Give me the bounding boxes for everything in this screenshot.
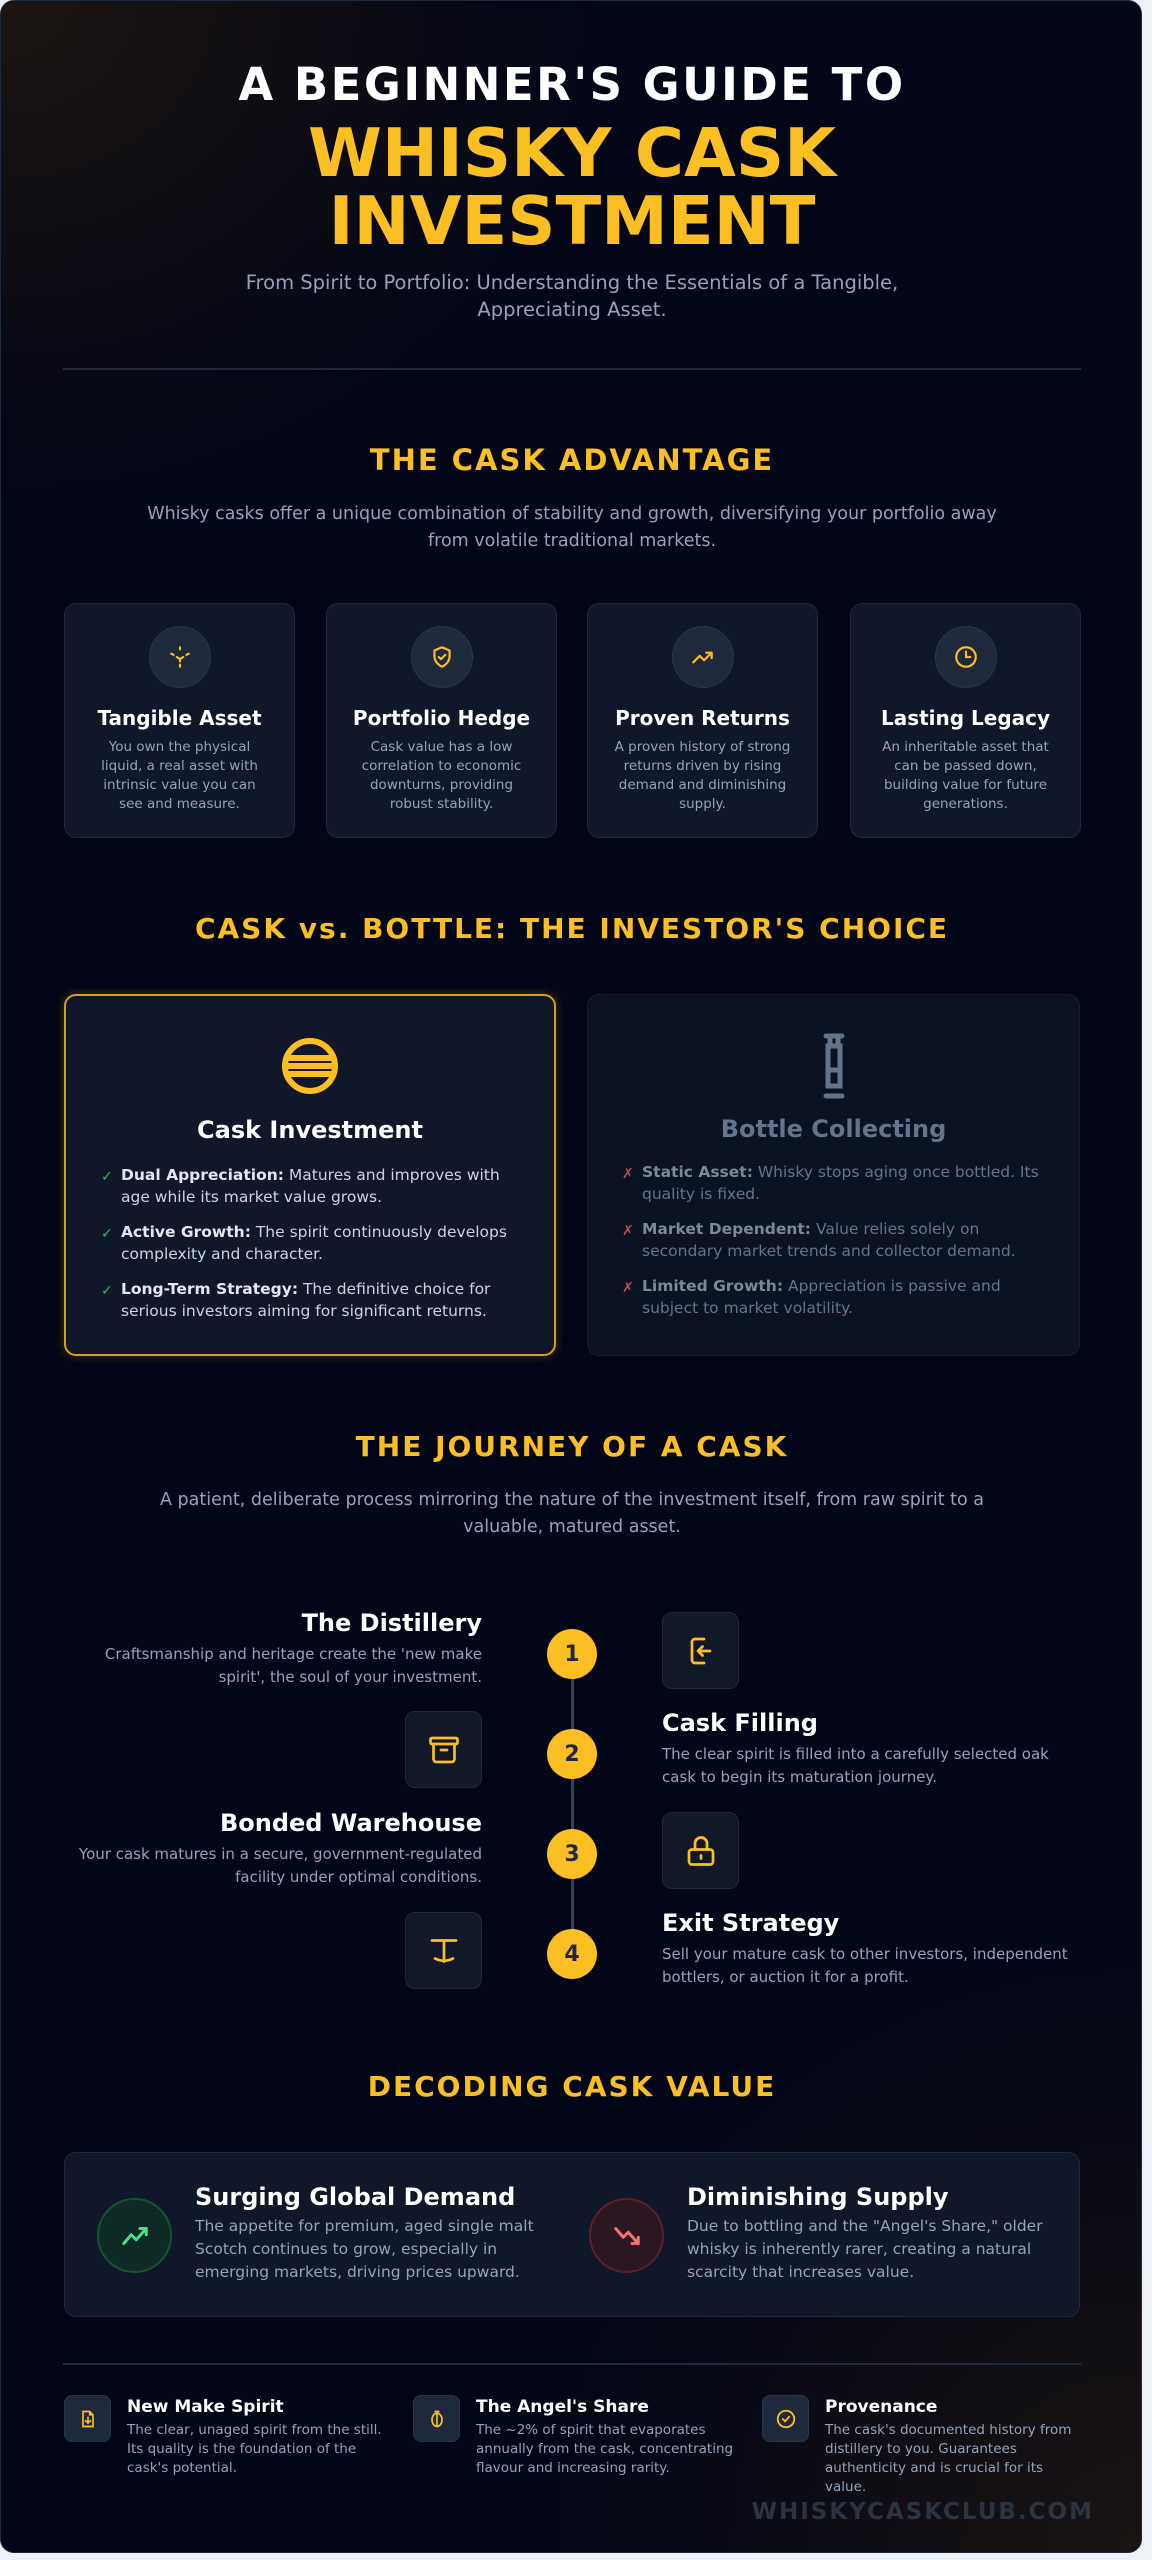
panel: cask investment: Long-Term Strategy: The definitive choice for serious investors aiming for significant returns. — [121, 1280, 490, 1320]
panel: cask investment: Active Growth: The spirit continuously develops complexity and character. — [121, 1223, 507, 1263]
panel: cask investment: Dual Appreciation: Matures and improves with age while its market value grows. — [121, 1166, 500, 1206]
panel: bottle collecting: Static Asset: Whisky stops aging once bottled. Its quality is fixed. — [642, 1163, 1039, 1203]
text: demand: Surging Global Demand — [195, 2183, 515, 2211]
heading: cask vs bottle: CASK vs. BOTTLE: THE INVESTOR'S CHOICE — [195, 912, 949, 945]
text: demand — [194, 2183, 534, 2281]
icon: demand — [97, 2198, 172, 2273]
text: supply: Diminishing Supply — [687, 2183, 949, 2211]
journey intro: A patient, deliberate process mirroring the nature of the investment itself, from raw spirit to a valuable, matured asset. — [160, 1490, 984, 1537]
step: bonded warehouse: Your cask matures in a secure, government-regulated facility under optimal conditions. — [79, 1845, 482, 1886]
panel: bottle collecting — [587, 994, 1080, 1356]
icon: clock — [935, 626, 997, 688]
panel: bottle collecting: Limited Growth: Appreciation is passive and subject to market volatility. — [642, 1277, 1001, 1317]
icon: cask — [282, 1038, 338, 1094]
icon: filling — [662, 1612, 739, 1689]
step 3 number: 3 — [564, 1842, 580, 1866]
step 3 number — [547, 1829, 597, 1879]
text: supply — [687, 2183, 1043, 2281]
icon: file — [64, 2395, 111, 2442]
text: supply: Due to bottling and the "Angel's Share," older whisky is inherently rarer, creating a natural scarcity that increases value. — [687, 2217, 1043, 2281]
card: tangible asset: You own the physical liquid, a real asset with intrinsic value you can see and measure. — [101, 739, 258, 812]
glossary: provenance — [762, 2395, 1071, 2495]
step 2 number: 2 — [564, 1742, 580, 1766]
icon: angel — [413, 2395, 460, 2442]
step: bonded warehouse — [78, 1809, 482, 1886]
step 4 number — [547, 1929, 597, 1979]
step 2 number — [547, 1729, 597, 1779]
title: A BEGINNER'S GUIDE TO — [238, 58, 906, 111]
step: cask filling: The clear spirit is filled into a carefully selected oak cask to begin its maturation journey. — [662, 1745, 1049, 1786]
card: lasting legacy: An inheritable asset that can be passed down, building value for future generations. — [882, 739, 1049, 812]
panel: bottle collecting: ✗ — [622, 1223, 634, 1239]
icon: check — [762, 2395, 809, 2442]
glossary: new make spirit: The clear, unaged spirit from the still. Its quality is the foundation of the cask's potential. — [127, 2422, 382, 2476]
panel: bottle collecting: ✗ — [622, 1280, 634, 1296]
icon: trend — [672, 626, 734, 688]
step: the distillery — [105, 1609, 482, 1686]
icon: bottle — [824, 1034, 844, 1098]
icon: supply — [589, 2198, 664, 2273]
card: proven returns — [587, 603, 818, 838]
glossary: new make spirit — [64, 2395, 382, 2476]
step 1 number — [547, 1629, 597, 1679]
panel: bottle collecting: ✗ — [622, 1166, 634, 1182]
panel: cask investment: ✓ — [101, 1283, 113, 1299]
icon: exit — [405, 1912, 482, 1989]
panel: bottle collecting: Bottle Collecting — [721, 1115, 946, 1143]
card: proven returns: A proven history of strong returns driven by rising demand and diminishing supply. — [615, 739, 790, 812]
step: bonded warehouse: Bonded Warehouse — [220, 1809, 482, 1837]
card: tangible asset — [64, 603, 295, 838]
panel: cask investment — [64, 994, 556, 1356]
panel: bottle collecting: Market Dependent: Value relies solely on secondary market trends and collector demand. — [642, 1220, 1016, 1260]
glossary: angel's share: The Angel's Share — [476, 2397, 649, 2417]
card: portfolio hedge — [326, 603, 557, 838]
glossary: angel's share — [413, 2395, 733, 2476]
panel: cask investment: ✓ — [101, 1226, 113, 1242]
panel: cask investment: ✓ — [101, 1169, 113, 1185]
card: portfolio hedge: Cask value has a low correlation to economic downturns, providing robust stability. — [362, 739, 521, 812]
card: portfolio hedge: Portfolio Hedge — [353, 706, 530, 730]
title: INVESTMENT — [329, 182, 815, 260]
text: demand: The appetite for premium, aged single malt Scotch continues to grow, especially in emerging markets, driving prices upward. — [195, 2217, 534, 2281]
step 1 number: 1 — [564, 1642, 580, 1666]
subtitle: From Spirit to Portfolio: Understanding the Essentials of a Tangible, Appreciating Asset. — [246, 271, 898, 321]
card: lasting legacy — [850, 603, 1081, 838]
footer brand: WHISKYCASKCLUB.COM — [752, 2499, 1094, 2525]
glossary: provenance: Provenance — [825, 2397, 937, 2417]
icon: archive — [405, 1711, 482, 1788]
heading: journey: THE JOURNEY OF A CASK — [356, 1430, 788, 1463]
step: cask filling: Cask Filling — [662, 1709, 818, 1737]
step: exit strategy: Sell your mature cask to other investors, independent bottlers, or auction it for a profit. — [662, 1945, 1068, 1986]
step: cask filling — [662, 1709, 1049, 1786]
card: lasting legacy: Lasting Legacy — [881, 706, 1050, 730]
timeline — [571, 1678, 574, 1930]
title: WHISKY CASK — [308, 114, 836, 192]
title — [238, 58, 906, 260]
step: the distillery: The Distillery — [302, 1609, 482, 1637]
panel: value drivers — [64, 2152, 1080, 2317]
step 4 number: 4 — [564, 1942, 580, 1966]
step: exit strategy — [662, 1909, 1068, 1986]
card: proven returns: Proven Returns — [615, 706, 790, 730]
panel: cask investment: Cask Investment — [197, 1116, 423, 1144]
icon: tangible — [149, 626, 211, 688]
step: exit strategy: Exit Strategy — [662, 1909, 839, 1937]
heading: decoding cask value: DECODING CASK VALUE — [368, 2070, 776, 2103]
glossary: new make spirit: New Make Spirit — [127, 2397, 284, 2417]
heading: the cask advantage: THE CASK ADVANTAGE — [370, 443, 774, 477]
step: the distillery: Craftsmanship and heritage create the 'new make spirit', the soul of your investment. — [105, 1645, 482, 1686]
card: tangible asset: Tangible Asset — [97, 706, 262, 730]
icon: shield — [411, 626, 473, 688]
glossary: angel's share: The ~2% of spirit that evaporates annually from the cask, concentrating flavour and increasing rarity. — [476, 2422, 733, 2476]
glossary: provenance: The cask's documented history from distillery to you. Guarantees authenticity and is crucial for its value. — [825, 2422, 1071, 2495]
advantage intro: Whisky casks offer a unique combination of stability and growth, diversifying your portfolio away from volatile traditional markets. — [147, 504, 997, 551]
icon: lock — [662, 1812, 739, 1889]
